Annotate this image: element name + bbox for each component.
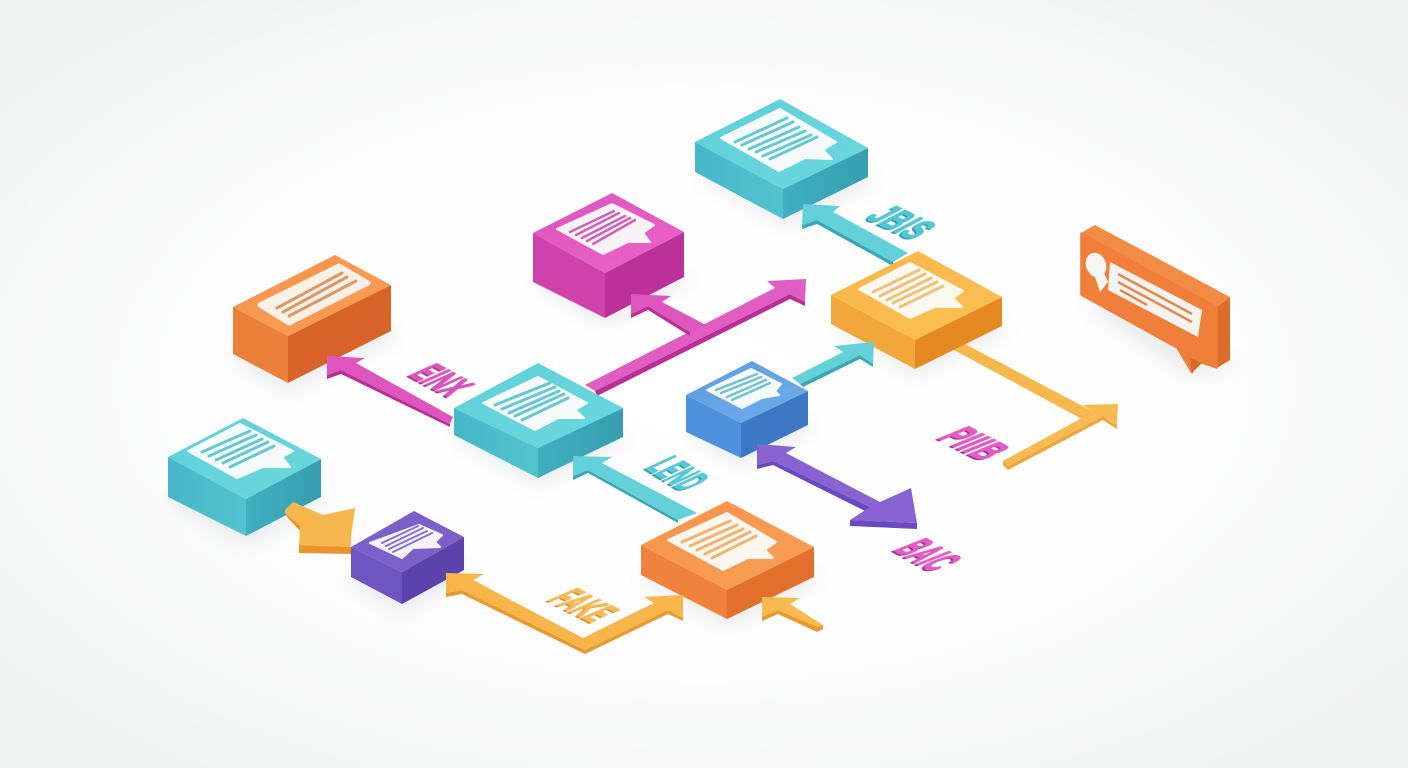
box: teal top xyxy=(695,99,868,219)
arrow: teal to top box xyxy=(802,204,908,266)
box: yellow xyxy=(831,251,1002,369)
label: PIIIB: PIIIB xyxy=(927,422,1022,465)
note: teal top xyxy=(721,109,836,171)
note: teal left xyxy=(188,424,293,478)
soft ground shadows xyxy=(165,140,1235,628)
arrow: yellow bent along bottom xyxy=(446,573,683,654)
note: teal centre xyxy=(483,377,587,430)
box: orange bottom xyxy=(641,501,814,619)
note: magenta xyxy=(557,204,654,254)
arrow: magenta long to upper right xyxy=(585,279,806,396)
note: orange bottom xyxy=(668,513,776,570)
label: LEND: LEND xyxy=(635,451,719,496)
arrow: magenta branch to magenta box xyxy=(631,294,706,336)
box: teal left xyxy=(168,418,321,536)
box: orange left xyxy=(233,255,391,383)
arrow: yellow bent to right xyxy=(952,343,1118,470)
icon: small white speech bubble xyxy=(1082,250,1110,292)
box: magenta xyxy=(533,193,684,318)
label: EINX: EINX xyxy=(398,359,483,401)
arrow: purple double-headed xyxy=(757,444,917,529)
note: orange left xyxy=(260,266,368,323)
box: blue xyxy=(686,361,808,458)
arrow: teal blue to yellow xyxy=(792,342,874,387)
arrow: magenta to orange left box xyxy=(327,356,453,427)
label: BAIC: BAIC xyxy=(883,534,973,576)
speech bubble panel xyxy=(1081,225,1230,373)
note: yellow xyxy=(859,263,963,318)
box: teal centre xyxy=(454,363,623,478)
label: FAKE: FAKE xyxy=(538,584,629,627)
label: JBIS: JBIS xyxy=(856,200,946,245)
arrow: small yellow into orange box xyxy=(762,597,823,632)
note: blue xyxy=(707,369,781,408)
box: purple xyxy=(351,511,464,604)
text panel with lines xyxy=(1108,262,1202,337)
note: purple xyxy=(370,525,442,558)
arrow: teal to centre box xyxy=(573,456,697,523)
arrow: big yellow between teal left and purple xyxy=(285,502,355,554)
